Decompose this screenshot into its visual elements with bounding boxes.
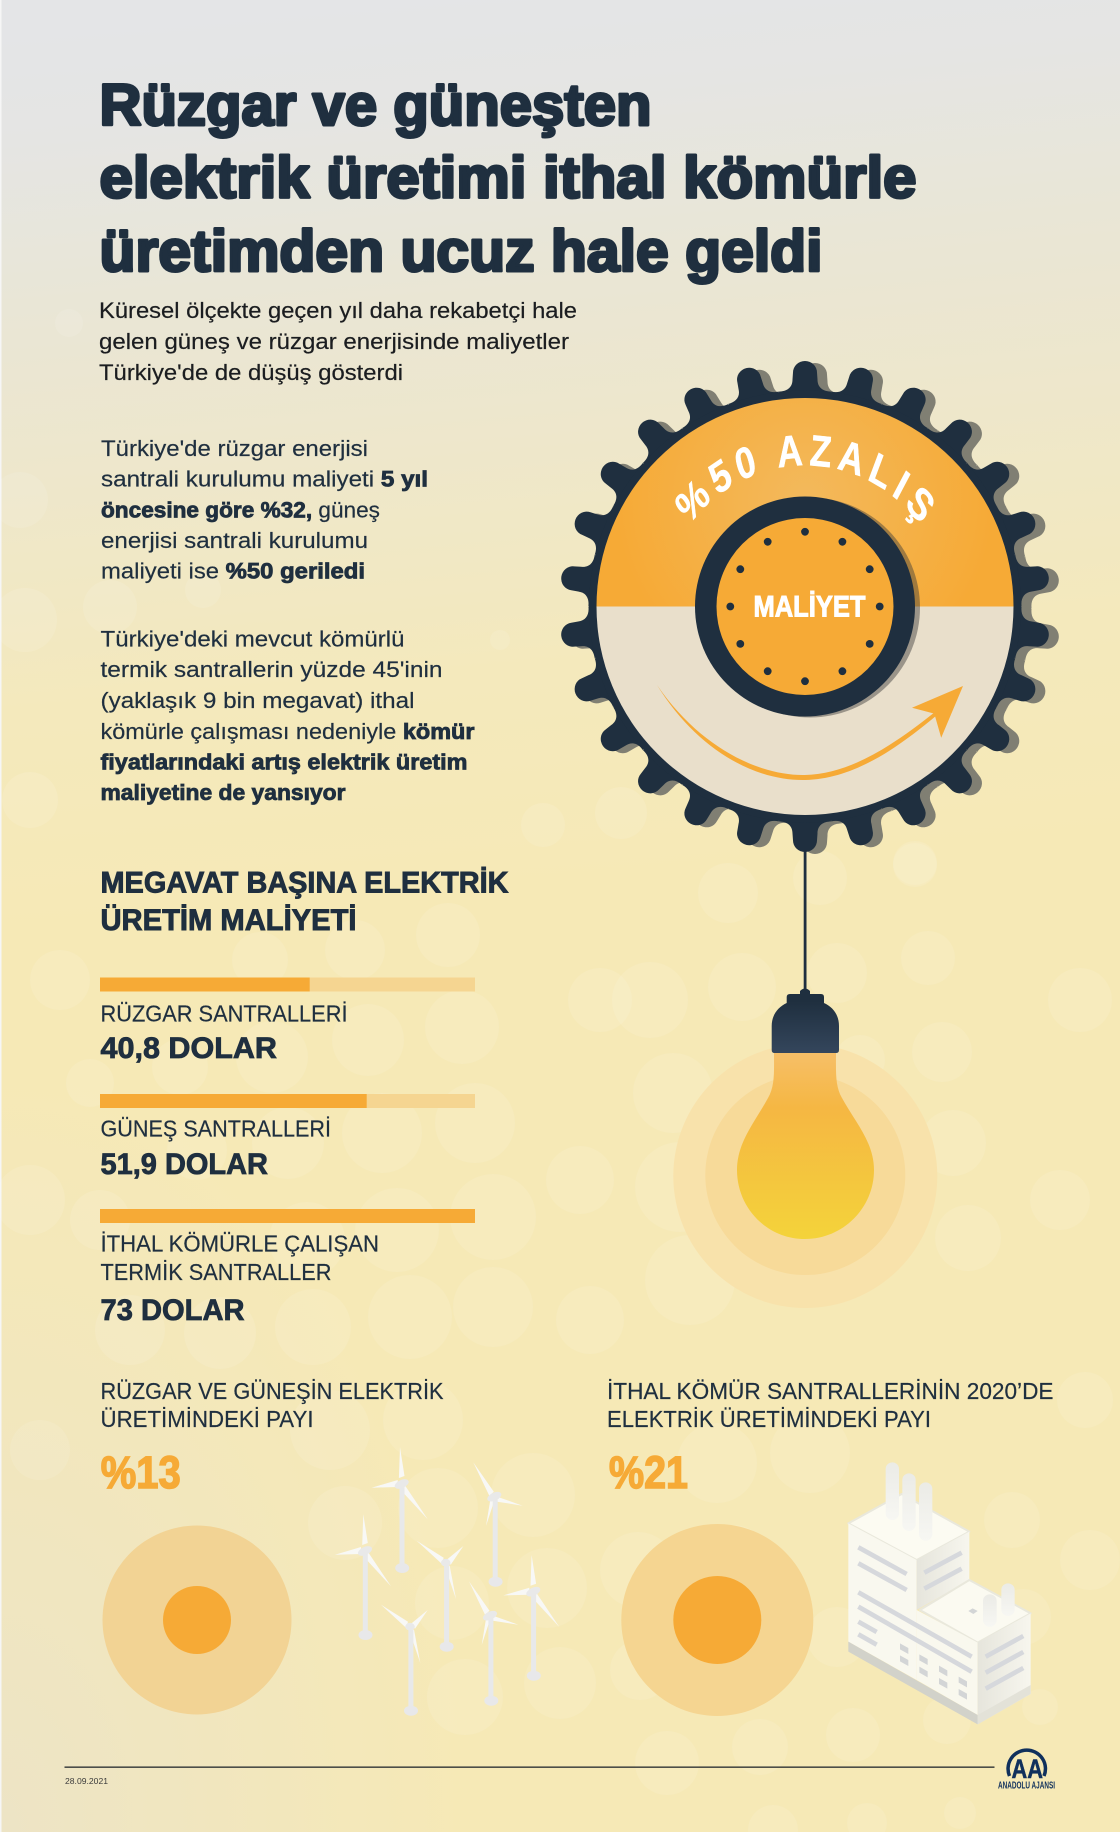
bar: wind plants: 40,8 DOLAR [100,1032,277,1065]
bulb glass [737,1052,874,1239]
proportional circles [621,1524,813,1716]
bulb halo inner [705,1075,905,1275]
bar: imported coal plants: TERMİK SANTRALLER [100,1259,332,1285]
heading: ÜRETİMİNDEKİ PAYI [100,1406,314,1432]
rising arrow [657,685,963,780]
bar: imported coal plants: 73 DOLAR [100,1294,245,1327]
title [100,73,916,284]
bar: imported coal plants: İTHAL KÖMÜRLE ÇALIŞAN [100,1231,379,1257]
title: Rüzgar ve güneşten [100,73,652,138]
value: %13 [101,1447,181,1498]
subtitle [99,298,577,385]
heading: cost per megawatt: MEGAVAT BAŞINA ELEKTRİK [100,867,509,900]
section: imported coal share [607,1378,1054,1724]
text block: installation costs: öncesine göre %32, güneş [101,497,380,522]
bulb cap [772,988,839,1053]
subtitle: Türkiye'de de düşüş gösterdi [99,360,403,385]
light bulb [673,850,937,1308]
subtitle: Küresel ölçekte geçen yıl daha rekabetçi hale [99,298,577,323]
gear teeth [558,361,1052,852]
heading: cost per megawatt: ÜRETİM MALİYETİ [100,904,356,937]
text block: imported coal [100,627,475,805]
bar: imported coal plants [100,1209,475,1327]
section: wind and solar share [100,1378,559,1716]
heading: cost per megawatt [100,867,509,937]
heading: ELEKTRİK ÜRETİMİNDEKİ PAYI [607,1406,931,1432]
title: elektrik üretimi ithal kömürle [100,146,916,210]
footer rule [64,1766,994,1768]
value: %21 [609,1447,688,1498]
bulb halo outer [673,1044,937,1308]
heading [607,1378,1054,1432]
proportional circles [102,1526,292,1714]
label: MALİYET: MALİYET [754,590,866,624]
disc: upper orange half [596,398,1014,606]
inner ring [695,496,915,716]
bar: wind plants: RÜZGAR SANTRALLERİ [100,1001,348,1027]
ring shadow [700,498,920,718]
text block: imported coal: kömürle çalışması nedeniyle kömür [100,719,475,744]
text block: installation costs: Türkiye'de rüzgar enerjisi [101,436,368,461]
dial dots [726,528,884,685]
icon: coal power plant [848,1462,1031,1724]
disc: lower beige half [596,606,1014,815]
title: üretimden ucuz hale geldi [100,219,822,284]
cord [804,850,806,992]
bar: solar plants: 51,9 DOLAR [100,1148,268,1181]
text block: imported coal: fiyatlarındaki artış elektrik üretim [100,749,468,774]
heading [100,1378,444,1432]
inner orange dial [716,518,894,695]
text block: installation costs [101,436,428,583]
date: 28.09.2021 [65,1776,108,1786]
logo: Anadolu Ajansı: AA [1012,1754,1043,1784]
text block: imported coal: Türkiye'deki mevcut kömürlü [100,627,404,652]
icon: wind turbines [335,1447,559,1716]
text block: imported coal: (yaklaşık 9 bin megavat) ithal [100,688,414,713]
bar: solar plants [100,1094,475,1181]
heading: İTHAL KÖMÜR SANTRALLERİNİN 2020’DE [607,1378,1054,1404]
heading: RÜZGAR VE GÜNEŞİN ELEKTRİK [100,1378,444,1404]
logo: Anadolu Ajansı [998,1750,1055,1792]
bar chart: cost per megawatt [100,978,475,1327]
text block: imported coal: termik santrallerin yüzde 45'inin [100,657,442,682]
text block: installation costs: enerjisi santrali kurulumu [101,528,368,553]
text block: installation costs: maliyeti ise %50 geriledi [101,558,365,583]
text block: imported coal: maliyetine de yansıyor [100,780,346,805]
curved label: %50 AZALIŞ: %50 AZALIŞ [675,435,934,524]
text block: installation costs: santrali kurulumu maliyeti 5 yıl [101,467,428,492]
gear shadow [568,363,1062,854]
bar: solar plants: GÜNEŞ SANTRALLERİ [100,1116,331,1142]
gear: cost dial [561,361,1059,854]
bar: wind plants [100,978,475,1065]
subtitle: gelen güneş ve rüzgar enerjisinde maliyetler [99,329,569,354]
logo: Anadolu Ajansı: ANADOLU AJANSI [998,1781,1055,1792]
